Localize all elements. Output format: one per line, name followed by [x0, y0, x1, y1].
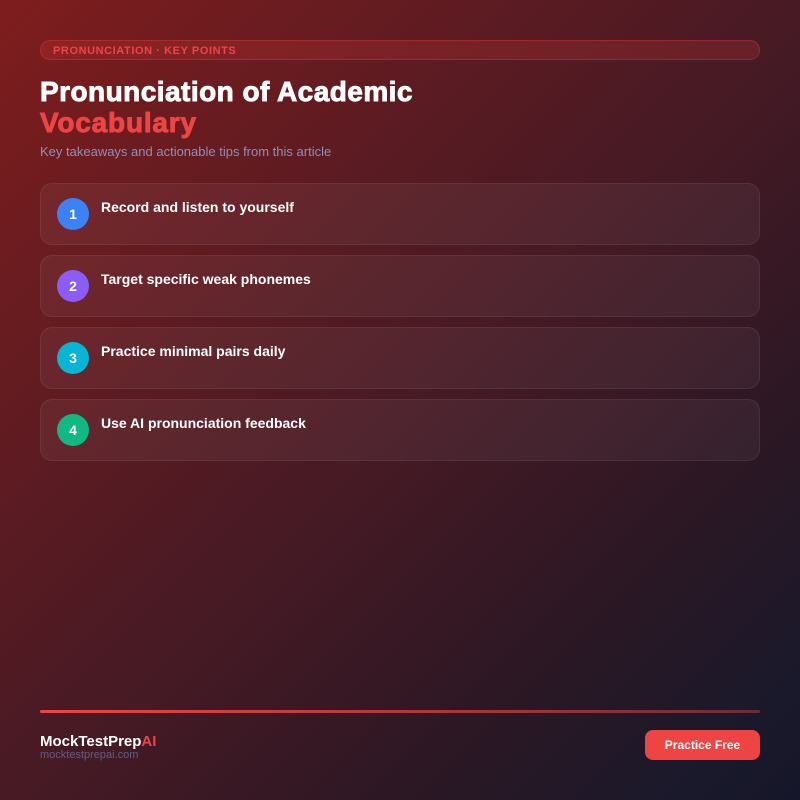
card 4: 4 [69, 422, 77, 438]
subtitle: Key takeaways and actionable tips from this article [40, 144, 331, 159]
brand url: mocktestprepai.com [40, 749, 138, 761]
card 2: 2 [69, 278, 77, 294]
badge: PRONUNCIATION · KEY POINTS [53, 45, 236, 57]
title: Pronunciation of Academic [40, 76, 413, 107]
brand name: MockTestPrepAI [40, 733, 156, 750]
brand [40, 733, 156, 761]
title: Vocabulary [40, 107, 197, 138]
card 1: Record and listen to yourself [101, 199, 294, 215]
card 3: Practice minimal pairs daily [101, 343, 285, 359]
badge [40, 40, 760, 60]
card 2: Target specific weak phonemes [101, 271, 311, 287]
call to action button: Practice Free [665, 738, 740, 752]
accent divider [40, 710, 760, 713]
card 2 [40, 255, 760, 317]
card 4 [40, 399, 760, 461]
card 3 [40, 327, 760, 389]
card 4: Use AI pronunciation feedback [101, 415, 306, 431]
card 3: 3 [69, 350, 77, 366]
card 1 [40, 183, 760, 245]
list of key points [40, 183, 760, 461]
title [40, 76, 413, 138]
call to action button [645, 730, 760, 760]
card 1: 1 [69, 206, 77, 222]
